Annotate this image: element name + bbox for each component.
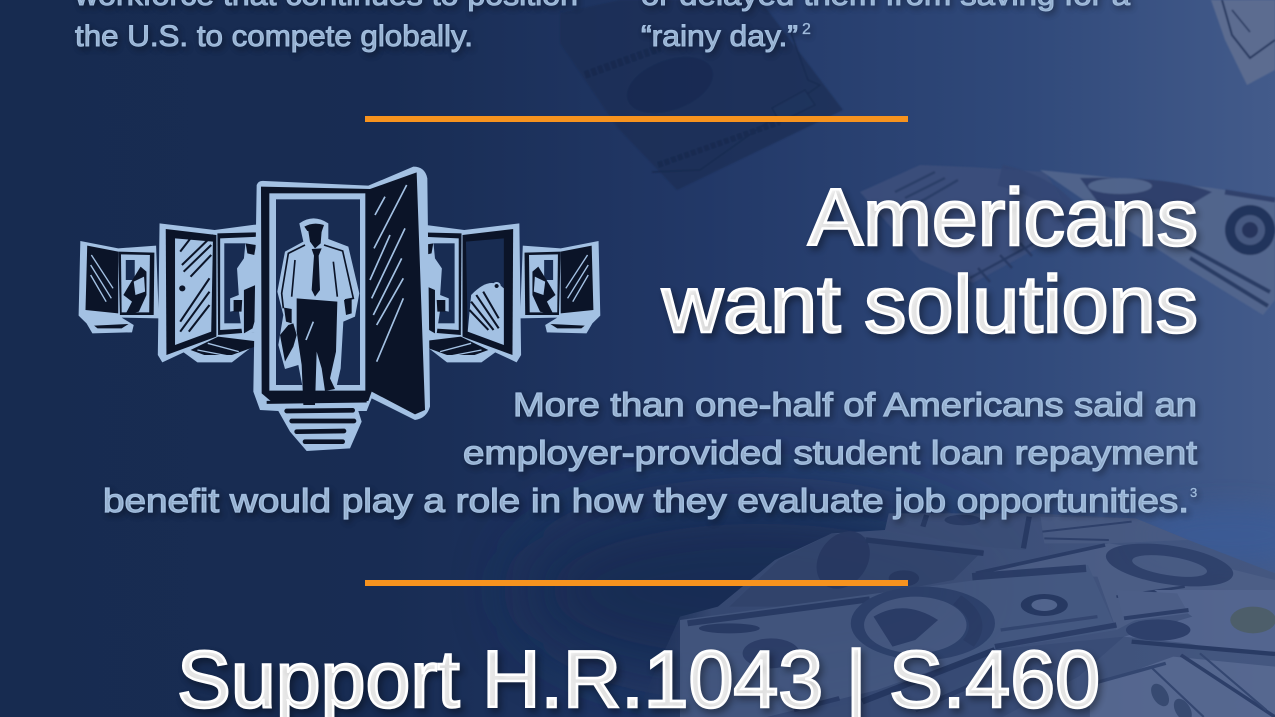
top text block, left column: the U.S. to compete globally. — [75, 20, 473, 53]
top text block, right column — [641, 0, 1130, 53]
top text block, left column — [74, 0, 578, 53]
body text: solutions statistic: benefit would play a role in how they evaluate job opportunities. — [103, 482, 1189, 519]
heading: Americans want solutions — [661, 173, 1198, 350]
orange divider, lower — [365, 580, 908, 586]
photo: curved dollar bill, right of heading — [860, 165, 1275, 315]
icon: businessman walking through a row of open doors — [79, 167, 600, 451]
left side doors — [79, 223, 259, 362]
top text block, right column: “rainy day.” — [641, 20, 798, 53]
photo: pile of dollar bills, bottom right — [634, 513, 1275, 717]
right side doors — [419, 223, 600, 362]
body text: solutions statistic — [103, 386, 1197, 519]
heading: Americans want solutions: want solutions — [661, 260, 1198, 350]
body text: solutions statistic: employer-provided student loan repayment — [463, 434, 1197, 471]
central door and man — [253, 167, 430, 451]
top text block, right column: 2 — [802, 21, 811, 38]
photo: falling dollar bill, top right corner — [1211, 0, 1275, 85]
orange divider, upper — [365, 116, 908, 122]
photo: falling dollar bill, top centre — [560, 0, 843, 190]
heading: Americans want solutions: Americans — [808, 173, 1198, 263]
body text: solutions statistic: 3 — [1190, 485, 1197, 500]
body text: solutions statistic: More than one-half of Americans said an — [513, 386, 1197, 423]
